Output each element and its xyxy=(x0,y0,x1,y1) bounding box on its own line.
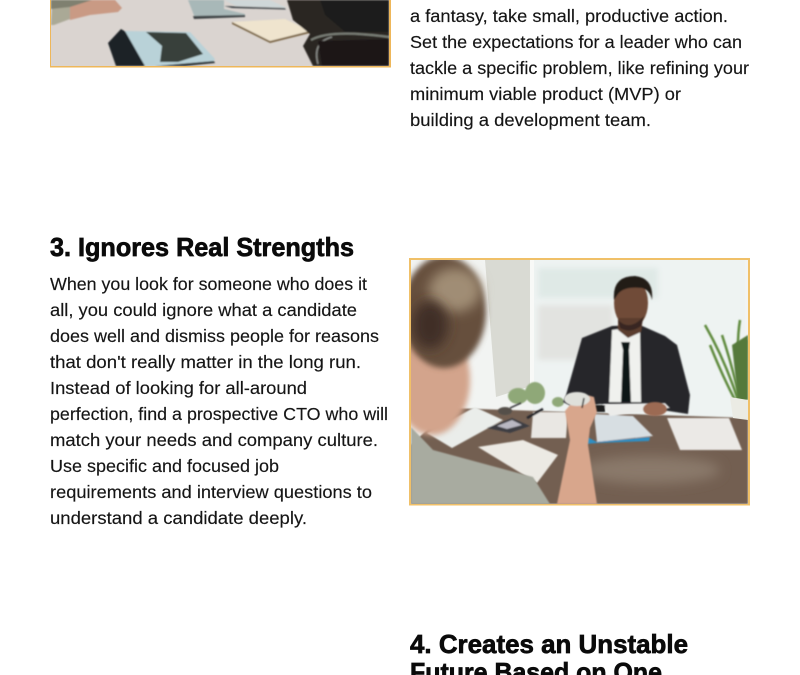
tie xyxy=(621,342,631,402)
text block: end of section 2: a fantasy, take small, productive action. xyxy=(410,6,728,26)
dark chairs xyxy=(287,0,389,66)
tablet xyxy=(108,29,146,66)
shirt xyxy=(609,326,641,402)
text block: end of section 2: minimum viable product (MVP) or xyxy=(410,84,681,104)
heading: 3. Ignores Real Strengths: 3. Ignores Real Strengths xyxy=(50,232,354,262)
window scene xyxy=(533,260,745,420)
heading: 4. Creates an Unstable Future Based on One: 4. Creates an Unstable xyxy=(410,629,688,659)
text block: section 3 body: that don't really matter in the long run. xyxy=(50,352,361,372)
hand and sleeve xyxy=(68,0,122,20)
calculator xyxy=(487,418,530,433)
text block: section 3 body xyxy=(50,274,388,528)
text block: section 3 body: Use specific and focused job xyxy=(50,456,279,476)
notebook xyxy=(232,19,310,41)
desk xyxy=(411,408,748,504)
foreground person: shirt, neck, hair xyxy=(411,340,474,438)
text block: section 3 body: all, you could ignore what a candidate xyxy=(50,300,357,320)
text block: section 3 body: understand a candidate deeply. xyxy=(50,508,307,528)
papers xyxy=(224,0,287,8)
text block: section 3 body: match your needs and company culture. xyxy=(50,430,378,450)
leaves behind desk xyxy=(508,382,564,407)
foreground paper xyxy=(478,440,558,483)
papers on desk xyxy=(427,402,742,483)
text block: end of section 2: tackle a specific problem, like refining your xyxy=(410,58,749,78)
photo: job interview across a desk xyxy=(394,256,750,506)
text block: section 3 body: When you look for someone who does it xyxy=(50,274,367,294)
text block: section 3 body: Instead of looking for all-around xyxy=(50,378,307,398)
pillar xyxy=(485,260,534,397)
text block: section 3 body: perfection, find a prospective CTO who will xyxy=(50,404,388,424)
heading: 4. Creates an Unstable Future Based on One xyxy=(410,629,688,675)
text block: end of section 2 xyxy=(410,6,749,130)
text block: section 3 body: requirements and interview questions to xyxy=(50,482,372,502)
text block: section 3 body: does well and dismiss people for reasons xyxy=(50,326,379,346)
magnifier and pen xyxy=(498,407,512,415)
man: jacket xyxy=(563,276,690,414)
text block: end of section 2: building a development team. xyxy=(410,110,651,130)
interviewer's hand xyxy=(557,392,597,504)
plant xyxy=(705,320,746,400)
head xyxy=(613,286,650,322)
photo: meeting table with tablet and notebook xyxy=(50,0,391,68)
laptop xyxy=(188,0,245,18)
binder papers xyxy=(427,407,503,448)
text block: end of section 2: Set the expectations for a leader who can xyxy=(410,32,742,52)
